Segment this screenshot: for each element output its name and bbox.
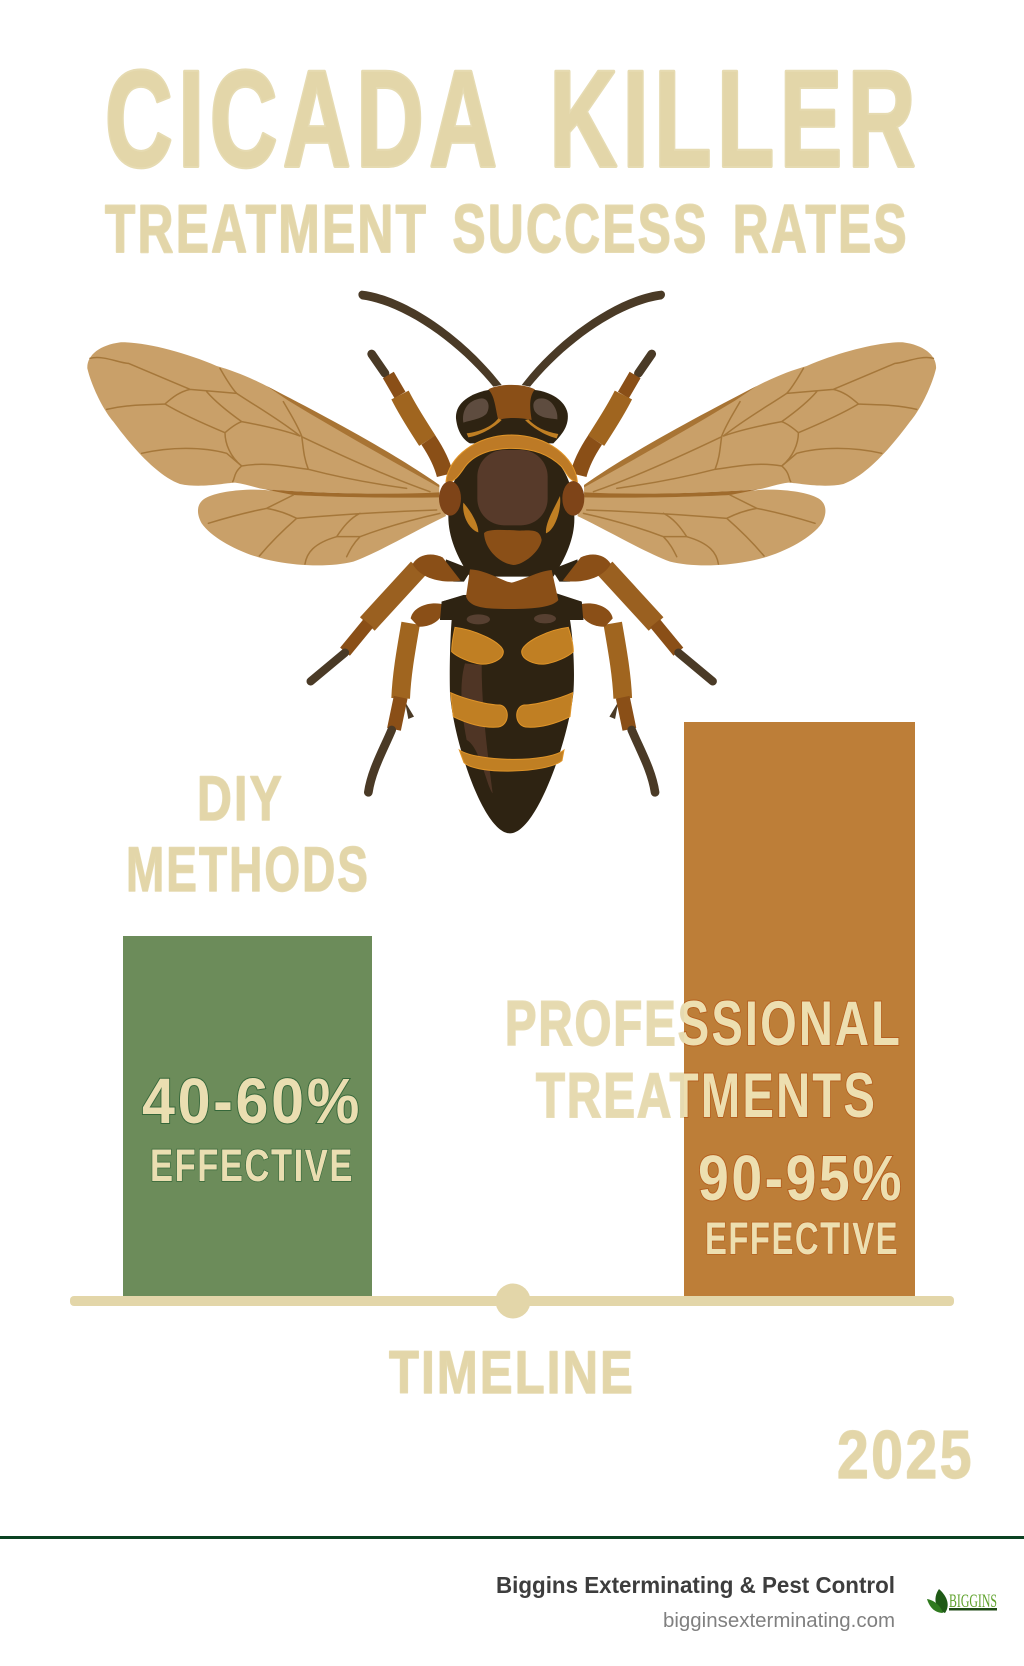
logo: Biggins	[927, 1589, 997, 1613]
illustration: cicada killer wasp	[87, 291, 936, 833]
wasp abdomen	[440, 593, 583, 833]
logo: Biggins: BIGGINS	[949, 1591, 997, 1612]
timeline marker	[496, 1284, 530, 1318]
timeline bar	[70, 1296, 954, 1306]
heading: PROFESSIONAL: PROFESSIONAL	[505, 989, 902, 1059]
heading: METHODS: METHODS	[126, 835, 370, 905]
wasp wings and legs, right side	[522, 291, 936, 792]
wasp wings and legs, left side	[87, 291, 502, 792]
footer divider	[0, 1536, 1024, 1539]
heading: TREATMENTS: TREATMENTS	[536, 1061, 877, 1131]
wasp head and thorax	[439, 385, 584, 577]
heading: DIY: DIY	[197, 764, 284, 834]
label: effective: EFFECTIVE	[705, 1213, 899, 1264]
bar: professional	[684, 722, 915, 1296]
timeline axis	[70, 1284, 954, 1318]
stat: 40-60%: 40-60%	[142, 1065, 362, 1137]
bar: DIY	[123, 936, 372, 1296]
timeline label: TIMELINE	[389, 1339, 635, 1406]
footer website: bigginsexterminating.com	[663, 1610, 895, 1632]
wasp saddle	[466, 569, 558, 609]
footer company name: Biggins Exterminating & Pest Control	[496, 1572, 895, 1598]
panel: DIY methods	[123, 764, 372, 1296]
panel: professional treatments	[505, 722, 915, 1296]
stat: 90-95%: 90-95%	[698, 1142, 904, 1214]
label: effective: EFFECTIVE	[150, 1140, 354, 1191]
year: 2025	[837, 1417, 974, 1493]
